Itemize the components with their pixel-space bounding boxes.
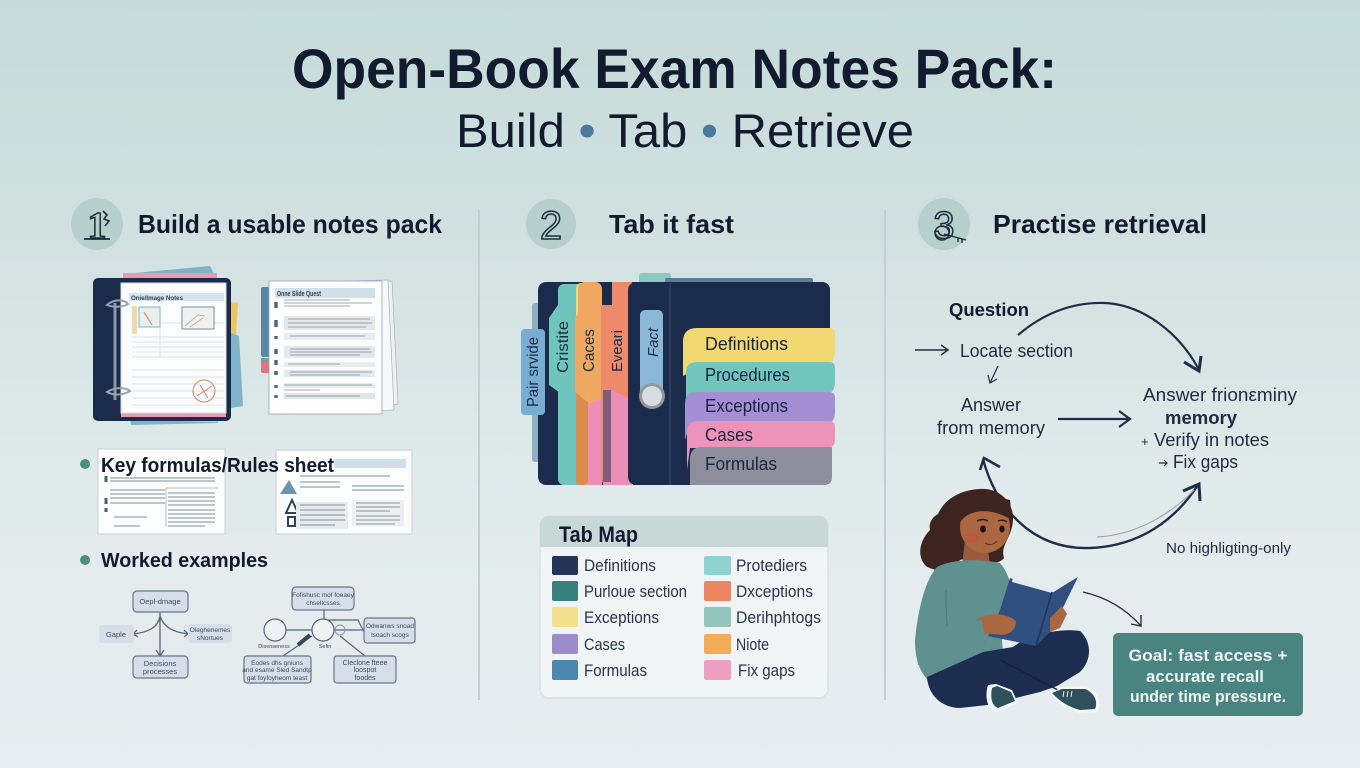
subtitle: Build • Tab • Retrieve — [456, 104, 914, 157]
side tab: Cristite — [549, 302, 575, 395]
illustration: student reading — [915, 489, 1099, 713]
neck and face — [962, 540, 990, 566]
tab: Exceptions — [685, 392, 835, 440]
retrieval cycle diagram: Fix gaps — [1173, 452, 1238, 472]
step 3 badge — [918, 198, 970, 250]
retrieval cycle diagram: + — [1141, 434, 1149, 449]
side tab: Caces: Caces — [581, 329, 598, 372]
retrieval cycle diagram: No highligting-only — [1166, 541, 1292, 557]
flowchart: worked example right: Sefin — [319, 644, 331, 650]
panel: tab map legend: Niote — [736, 636, 769, 654]
icon: tabbed binder — [521, 273, 835, 485]
flowchart: worked example right: Odwanws snoad — [366, 623, 414, 630]
step 3 badge: 3 — [933, 205, 955, 247]
arrow: answer to verify — [1058, 411, 1130, 427]
retrieval cycle diagram — [915, 299, 1297, 557]
step 1 badge — [71, 198, 123, 250]
flowchart: worked example left: Gaple — [106, 630, 126, 639]
panel: tab map legend: Cases — [584, 636, 625, 654]
side tab: Caces — [575, 305, 601, 404]
retrieval cycle diagram: Locate section — [960, 341, 1073, 361]
flowchart: worked example right: loospot — [354, 667, 376, 674]
icon: one-page summary sheets — [261, 280, 398, 414]
panel: tab map legend — [540, 516, 828, 698]
arrow: locate to answer — [988, 366, 998, 383]
tab: Formulas: Formulas — [705, 454, 777, 474]
panel: tab map legend: Formulas — [584, 662, 647, 680]
flowchart: worked example left: Oepl-dmage — [139, 597, 181, 606]
panel: tab it fast — [521, 199, 835, 698]
retrieval cycle diagram: Verify in notes — [1154, 430, 1269, 450]
icon: one-page summary sheets: Onne Slide Quest — [277, 291, 321, 298]
bullet: key formulas — [80, 449, 412, 534]
panel: tab map legend: Purloue section — [584, 583, 687, 601]
callout: goal: accurate recall — [1146, 667, 1264, 686]
panel: tab map legend: Exceptions — [584, 609, 659, 627]
step 2 badge: 2 — [540, 204, 562, 248]
sleeve — [915, 620, 985, 665]
flowchart: worked example right: gat foyfoyheom teast — [247, 675, 307, 682]
flowchart: worked example right: Cleclone fteee — [343, 660, 387, 667]
flowchart: worked example right: lsoach scogs — [371, 632, 410, 639]
flowchart: worked example right: chseltcsses — [306, 600, 341, 607]
flowchart: worked example left — [99, 591, 232, 678]
icon: ring binder with notes: Onie/Image Notes — [131, 295, 183, 302]
retrieval cycle diagram: Answer — [961, 395, 1021, 415]
retrieval cycle diagram: from memory — [937, 418, 1045, 438]
sheet: formulas left — [98, 449, 225, 534]
flowchart: worked example left: sNortues — [197, 635, 224, 642]
panel: practise retrieval — [915, 198, 1303, 716]
tab: Formulas — [690, 447, 832, 485]
side tab: Fact with ring: Fact — [645, 327, 662, 357]
tab: Procedures: Procedures — [705, 365, 790, 385]
heading: key formulas: Key formulas/Rules sheet — [101, 454, 334, 477]
tab: Exceptions: Exceptions — [705, 396, 788, 416]
legend title: Tab Map — [559, 522, 638, 547]
retrieval cycle diagram: memory — [1165, 408, 1237, 428]
callout: goal: under time pressure. — [1130, 687, 1286, 706]
arrow: into locate — [915, 345, 948, 355]
sweater — [915, 560, 1012, 680]
panel: tab map legend: Derihphtogs — [736, 609, 821, 627]
side tab: Eveari — [601, 305, 628, 398]
flowchart: worked example right: foodes — [354, 675, 376, 682]
side tab: Fact with ring — [639, 310, 665, 409]
panel: tab map legend: Fix gaps — [738, 662, 795, 680]
panel: tab map legend: Dxceptions — [736, 583, 813, 601]
hair — [920, 489, 1013, 570]
flowchart: worked example left: processes — [143, 667, 177, 676]
title — [292, 37, 1057, 157]
step 2 badge — [526, 199, 576, 249]
title: Open-Book Exam Notes Pack: — [292, 37, 1057, 100]
panel: tab map legend: Definitions — [584, 557, 656, 575]
tab: Procedures — [686, 362, 835, 400]
right shoe — [1050, 686, 1099, 713]
panel: tab map legend: Protediers — [736, 557, 807, 575]
tab: Definitions: Definitions — [705, 334, 788, 354]
heading: tab: Tab it fast — [609, 209, 734, 239]
flowchart: worked example left: Decisions — [144, 659, 177, 668]
arrow: book to goal — [1083, 592, 1141, 626]
arrow: bottom curve — [980, 458, 1200, 548]
flowchart: worked example right: Fofishusc mof foeaey — [292, 592, 355, 599]
sheet: rules right — [276, 450, 412, 534]
panel: build a usable notes pack — [71, 198, 443, 683]
retrieval cycle diagram: Question — [949, 299, 1029, 320]
flowchart: worked example right: Disenseness — [258, 644, 290, 650]
callout: goal: Goal: fast access + — [1128, 646, 1288, 665]
flowchart: worked example right: and esame Sled Sandtp — [242, 667, 312, 674]
flowchart: worked example right — [242, 587, 415, 683]
hands — [977, 614, 1016, 635]
callout: goal — [1113, 633, 1303, 716]
tab: Definitions — [683, 328, 835, 376]
pants — [927, 630, 1089, 708]
book — [988, 577, 1078, 646]
flowchart: worked example right: Eodes dhs gniuns — [251, 660, 304, 667]
side tab: Cristite: Cristite — [555, 321, 572, 373]
heading: build: Build a usable notes pack — [138, 209, 443, 239]
tab: Cases: Cases — [705, 425, 753, 445]
side tab: Pair srvide — [521, 329, 545, 415]
side tab: Pair srvide: Pair srvide — [525, 337, 542, 407]
side tab: Eveari: Eveari — [609, 330, 626, 372]
step 1 badge: 1 — [88, 205, 106, 247]
flowchart: worked example left: Oleghenemes — [190, 627, 231, 634]
heading: practise: Practise retrieval — [993, 209, 1207, 239]
retrieval cycle diagram: Answer frionεminy — [1143, 385, 1297, 405]
tab: Cases — [687, 421, 835, 470]
bullet: worked examples: Worked examples — [101, 549, 268, 572]
arrow: top curve — [1018, 303, 1201, 371]
left shoe — [986, 684, 1018, 712]
icon: ring binder with notes — [93, 266, 243, 425]
